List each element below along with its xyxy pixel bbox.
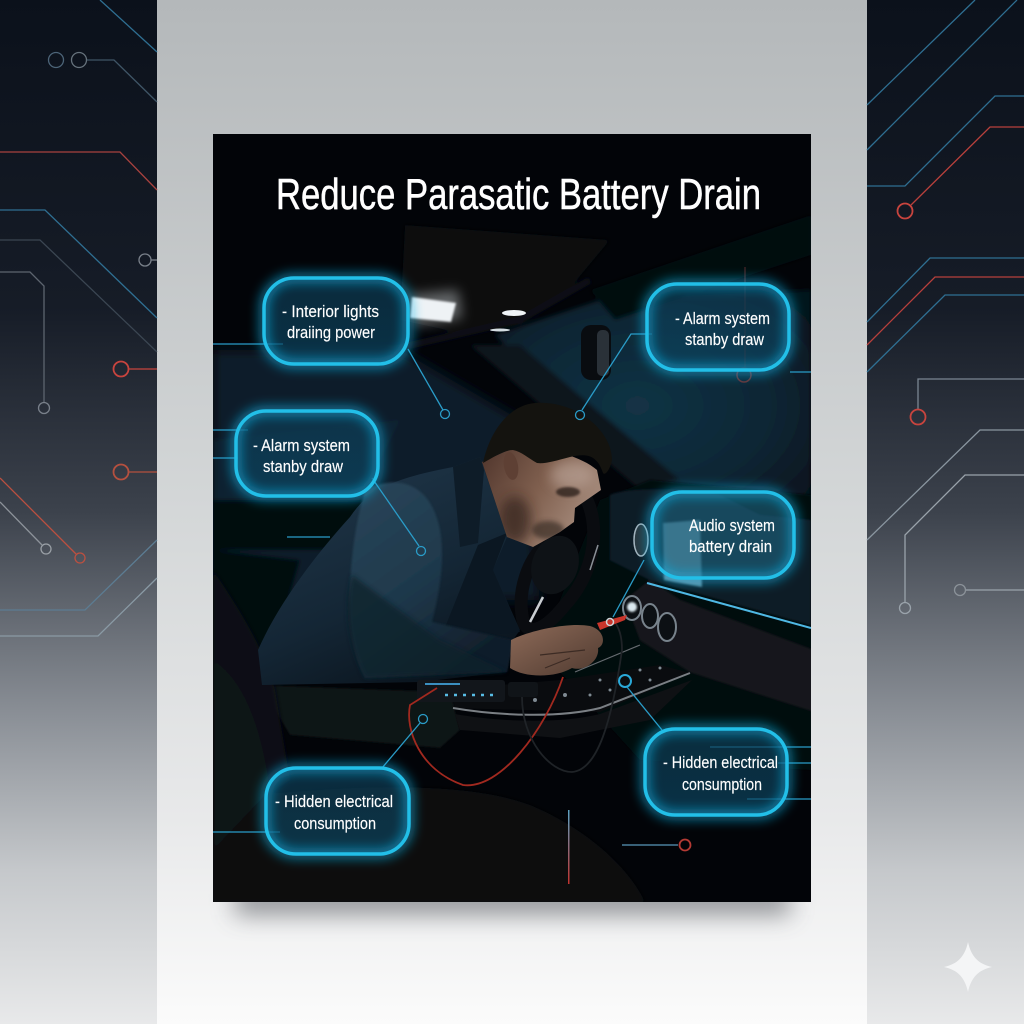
cabin ambient: [213, 350, 540, 600]
probe: [597, 615, 627, 630]
poster: [213, 134, 840, 902]
poster drop shadow: [235, 885, 790, 915]
callout: interior lights: draiing power: [287, 323, 375, 342]
neck and face: [482, 450, 601, 547]
sleeve: [350, 483, 513, 678]
callout: hidden consumption left: consumption: [294, 814, 376, 833]
callout: alarm system left: [236, 411, 378, 496]
ear: [505, 456, 518, 480]
dashboard and console: [213, 480, 840, 902]
icon: sparkle watermark: [944, 942, 992, 992]
chest shadow: [448, 534, 520, 632]
callout: alarm system right: stanby draw: [685, 330, 765, 349]
vents: [623, 596, 676, 641]
right circuit panel: [867, 0, 1024, 1024]
callout: hidden consumption right: - Hidden electrical: [663, 753, 778, 772]
callout: audio system: Audio system: [689, 516, 775, 535]
red accent lines: [568, 267, 751, 884]
screen: [663, 520, 702, 587]
hair: [483, 403, 612, 474]
steering wheel: [521, 480, 598, 629]
multimeter and leads: [409, 624, 622, 785]
callout: hidden consumption left: - Hidden electrical: [275, 792, 393, 811]
callout: alarm system left: - Alarm system: [253, 436, 350, 455]
callout: alarm system right: - Alarm system: [675, 309, 770, 328]
console: [566, 665, 688, 712]
roof console: [400, 225, 610, 335]
pillar: [470, 345, 680, 490]
car interior scene: [213, 216, 811, 642]
armrest and trim: [260, 685, 460, 748]
callout: audio system: battery drain: [689, 537, 772, 556]
callout: interior lights: - Interior lights: [282, 302, 379, 321]
mechanic: [258, 403, 627, 685]
seats: [213, 570, 645, 902]
callout: audio system: [652, 492, 794, 578]
dash trim: [630, 579, 811, 712]
callout: interior lights: [264, 278, 408, 364]
callout: alarm system left: stanby draw: [263, 457, 344, 476]
callout: hidden consumption left: [266, 768, 409, 854]
title: Reduce Parasatic Battery Drain: [276, 170, 761, 219]
torso: [258, 457, 520, 685]
hand: [510, 625, 603, 676]
connector lines: [213, 334, 811, 832]
left circuit panel: [0, 0, 157, 1024]
rearview mirror: [581, 325, 611, 380]
gauge: [634, 524, 648, 556]
windshield: [495, 290, 811, 500]
dome light: [408, 290, 526, 332]
door band: [213, 500, 380, 550]
callout: alarm system right: [647, 284, 789, 370]
collar: [453, 457, 484, 547]
callout: hidden consumption right: consumption: [682, 775, 762, 794]
callout: hidden consumption right: [645, 729, 787, 815]
